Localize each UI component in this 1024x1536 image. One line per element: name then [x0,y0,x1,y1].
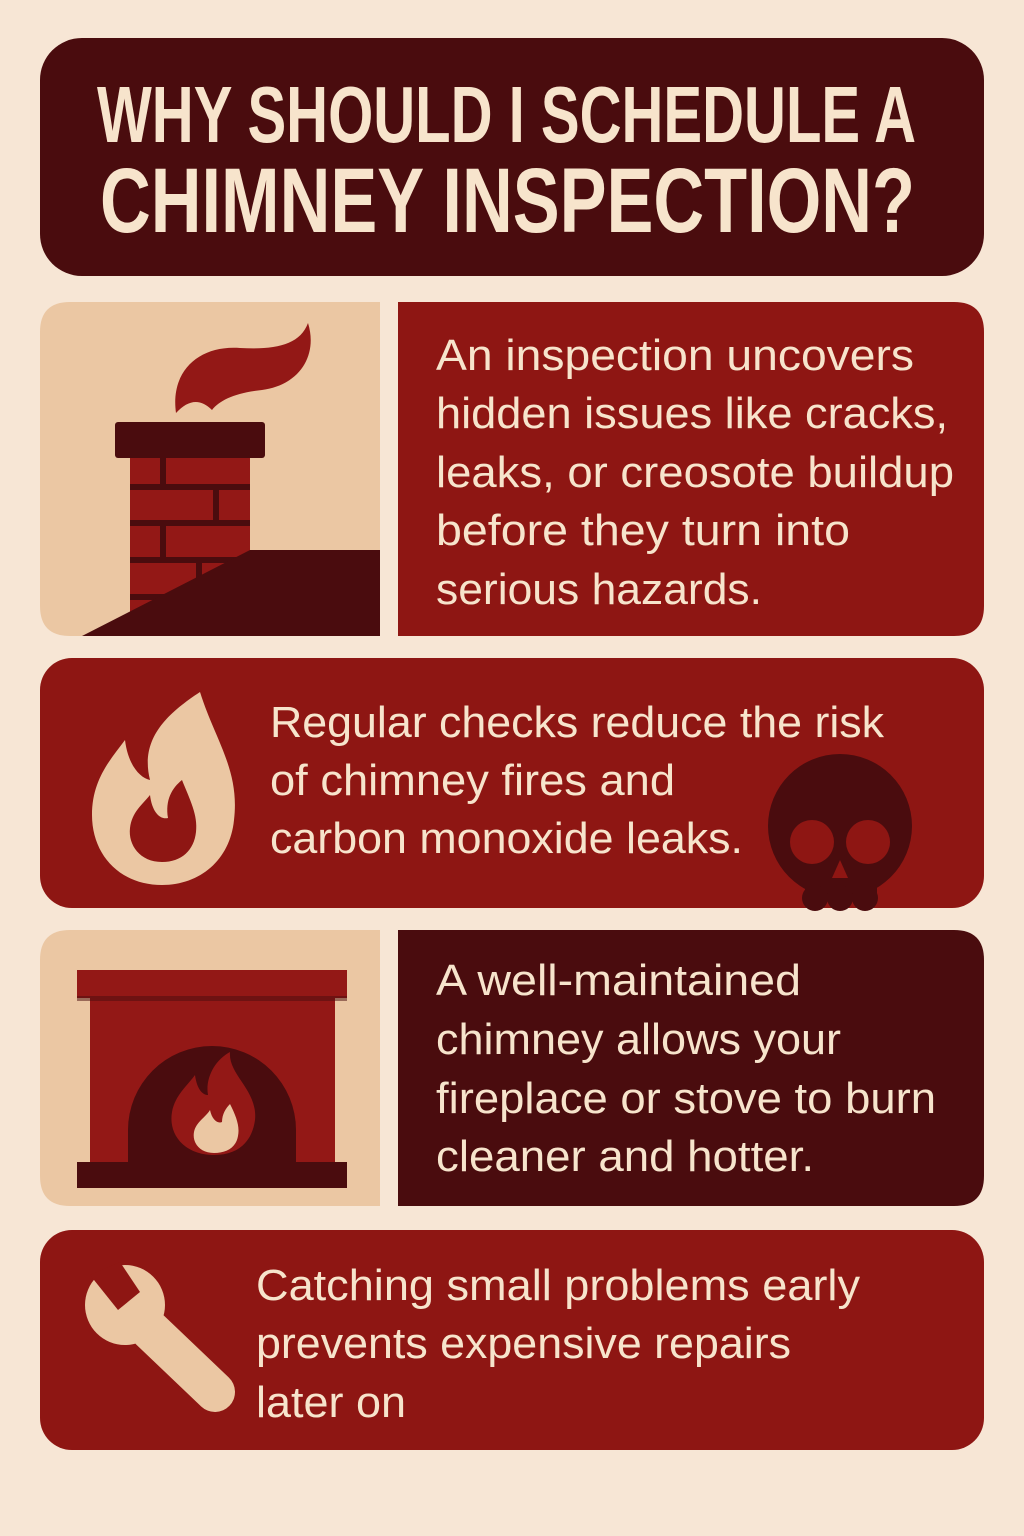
icon: wrench [85,1262,215,1392]
panel: hidden issues text: leaks, or creosote buildup [436,448,954,497]
panel: hidden issues text: An inspection uncovers [436,331,914,380]
panel: repairs [40,1230,984,1450]
panel: efficiency text: fireplace or stove to burn [436,1074,936,1123]
panel: repairs: later on [256,1378,406,1427]
title [40,38,984,276]
panel: efficiency text: A well-maintained [436,956,801,1005]
panel: fire risk: Regular checks reduce the risk [270,698,885,747]
panel: hidden issues text: before they turn into [436,506,850,555]
panel: repairs: Catching small problems early [256,1261,860,1310]
panel: efficiency text: chimney allows your [436,1015,841,1064]
panel: repairs: prevents expensive repairs [256,1319,791,1368]
panel: hidden issues text: hidden issues like cracks, [436,389,948,438]
panel: fire risk: of chimney fires and [270,756,675,805]
icon: chimney [82,422,380,636]
panel: efficiency text [398,930,984,1206]
icon: skull [768,754,912,911]
panel: fire risk [40,658,984,911]
panel: hidden issues text [398,302,984,636]
panel: fireplace icon [40,930,380,1206]
panel: efficiency text: cleaner and hotter. [436,1132,814,1181]
panel: chimney icon [40,302,380,636]
icon: smoke [175,323,311,413]
icon: flame [92,692,235,885]
panel: fire risk: carbon monoxide leaks. [270,814,743,863]
panel: hidden issues text: serious hazards. [436,565,762,614]
